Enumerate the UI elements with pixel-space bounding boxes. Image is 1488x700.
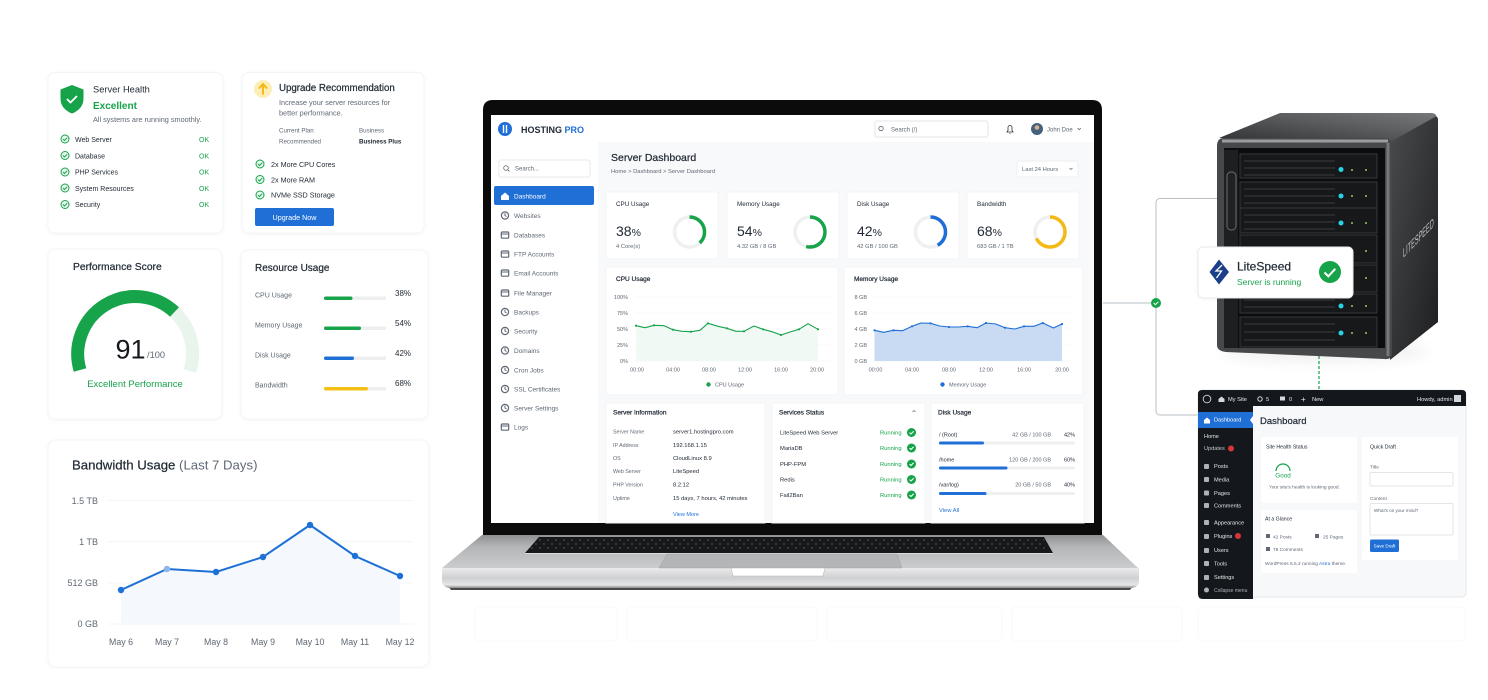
wp card: quick draft: Title [1370,464,1379,470]
panel: disk usage: View All [939,508,959,514]
panel: resource usage [241,250,428,419]
wp sidebar: Pages [1214,491,1230,497]
status list: Web Server [75,137,112,144]
wp admin bar: 0 [1289,397,1292,403]
status list: OK [199,154,209,160]
line chart: bandwidth: May 6 [109,637,133,647]
dropdown: last 24 hours [1017,161,1078,177]
wp sidebar: Users [1214,548,1229,554]
wp heading: Dashboard [1260,416,1306,427]
chart: cpu usage: 25% [617,343,628,349]
heading: bandwidth usage: Bandwidth Usage (Last 7 Days) [72,458,257,472]
nav items: Databases [514,232,546,240]
stat: memory usage: 4.32 GB / 8 GB [737,244,776,250]
panel: services status: Fail2Ban [780,493,803,499]
icon: check [1319,261,1341,283]
chart: memory usage: Memory Usage [949,382,986,388]
button: upgrade now [255,208,334,226]
chart: memory usage: 8 GB [854,295,867,301]
logo: hosting pro: HOSTING PRO [521,125,584,135]
chart: cpu usage: 20:00 [810,368,824,374]
wp admin bar [1198,390,1466,406]
top bar: John Doe [1047,128,1073,134]
feature list: NVMe SSD Storage [271,190,335,200]
nav: dashboard active: Dashboard [514,194,546,200]
feature list: 2x More CPU Cores [271,160,336,169]
status list: Database [75,154,105,160]
wp card: site health: Your site's health is looking good. [1269,484,1340,490]
chart: gauge [78,297,193,371]
text: description: better performance. [279,108,343,118]
nav items: File Manager [514,290,553,298]
panel: server information: server1.hostingpro.com [673,430,734,436]
door handle [1227,172,1236,230]
panel: disk usage: Disk Usage [938,410,972,416]
chart: memory usage: 16:00 [1017,368,1031,374]
nav items: SSL Certificates [514,386,561,394]
laptop bezel [483,100,1102,535]
panel: bandwidth usage [48,440,429,667]
panel: services status: MariaDB [780,446,803,452]
stat: bandwidth: Bandwidth [977,201,1007,208]
status list: PHP Services [75,170,119,176]
panel: server information: CloudLinux 8.9 [673,456,712,462]
text: description [279,98,391,118]
nav items: Security [514,328,538,336]
stat: memory usage [727,192,839,259]
nav items: Cron Jobs [514,368,544,374]
wp sidebar: Appearance [1214,520,1244,526]
stat: bandwidth: 68% [977,223,1002,239]
nav items: Domains [514,348,540,355]
score: 91: 91 [116,334,146,364]
panel: disk usage: 60% [1064,458,1075,464]
nav items: Backups [514,310,540,316]
heading: server health: Server Health [93,84,150,94]
wp card: at a glance: 78 Comments [1273,547,1303,553]
status list: OK [199,170,209,176]
vent lines [1244,161,1335,340]
chart: cpu usage: 12:00 [738,368,752,374]
decorative reflection boxes [475,607,1465,641]
heading: resource usage: Resource Usage [255,263,330,274]
resource bars: 54% [395,319,411,328]
stat: disk usage: Disk Usage [857,201,890,208]
laptop [442,100,1139,590]
stat: cpu usage [606,192,718,259]
panel: server information: LiteSpeed [673,469,699,475]
wp card: at a glance: At a Glance [1265,516,1292,522]
heading: server dashboard: Server Dashboard [611,152,696,164]
resource bars: 38% [395,289,411,298]
chart: memory usage: 04:00 [905,368,919,374]
stat: disk usage: 42% [857,223,882,239]
panel: server information: OS [613,456,621,462]
status leds [1338,167,1367,336]
chart: cpu usage: CPU Usage [715,382,744,388]
resource bars [255,289,411,390]
nav items: Websites [514,213,541,220]
wp sidebar [1198,406,1253,599]
wp sidebar: Media [1214,478,1230,484]
status list [61,135,209,209]
stat: disk usage: 42 GB / 100 GB [857,244,898,250]
wp sidebar: Updates [1204,446,1225,452]
resource bars: Bandwidth [255,382,288,390]
score: 91: /100 [147,350,165,360]
chart: cpu usage: 16:00 [774,368,788,374]
chart: cpu usage: 04:00 [666,368,680,374]
wp card: quick draft: Quick Draft [1370,444,1397,450]
panel: services status [772,403,925,523]
status: excellent: Excellent [93,101,138,112]
plan comparison: Recommended [279,138,322,146]
top bar: Search (/) [891,128,917,134]
stat: disk usage [847,192,959,259]
text: all systems: All systems are running smoothly. [93,115,202,124]
text: description: Increase your server resources for [279,98,391,107]
wp card: site health: Site Health Status [1266,444,1308,450]
wp card: quick draft: Save Draft [1374,544,1396,548]
chart: memory usage: 12:00 [979,368,993,374]
chart: memory usage: 08:00 [942,368,956,374]
wp sidebar: Settings [1214,575,1234,581]
panel: services status: Running [880,430,902,436]
chart: cpu usage: 100% [614,295,628,301]
plan comparison [279,128,402,146]
score: 91 [116,334,165,364]
panel: services status: Running [880,478,902,484]
logo: hosting pro [498,122,584,136]
resource bars: Disk Usage [255,352,291,360]
panel: server information: Web Server [613,469,641,475]
chart: memory usage [844,267,1083,395]
panel: disk usage: 40% [1064,482,1075,488]
heading: upgrade recommendation: Upgrade Recommendation [279,83,395,94]
wp card: site health [1261,437,1357,503]
panel: server information: IP Address [613,443,639,449]
resource bars: CPU Usage [255,292,292,300]
panel: disk usage: /home [939,458,954,464]
chart: cpu usage: 75% [617,311,628,317]
line chart: bandwidth: 1.5 TB [72,496,98,506]
wp sidebar: Posts [1214,464,1228,470]
line chart: bandwidth: May 11 [341,637,369,647]
wp sidebar: Home [1204,434,1219,440]
heading: server dashboard: Home > Dashboard > Server Dashboard [611,169,715,175]
panel: server information: Server Information [613,410,667,416]
status list: OK [199,137,209,144]
panel: disk usage: 20 GB / 50 GB [1015,482,1051,488]
panel: disk usage [931,403,1084,523]
panel: wordpress dashboard [1198,390,1466,599]
chart: cpu usage: 08:00 [702,368,716,374]
panel: server information: View More [673,512,699,518]
chart: cpu usage [606,267,838,395]
line chart: bandwidth: May 9 [251,637,275,647]
icon: upgrade arrow [254,80,272,98]
card: litespeed status [1198,247,1353,298]
panel: server information: 192.168.1.15 [673,443,707,449]
stat: bandwidth: 683 GB / 1 TB [977,244,1014,250]
panel: disk usage: 120 GB / 200 GB [1009,458,1051,464]
line chart: bandwidth: May 7 [155,637,179,647]
heading: server dashboard [611,152,715,175]
status list: OK [199,202,209,209]
text: litespeed: LiteSpeed [1237,260,1291,274]
wp admin bar: 5 [1266,397,1269,403]
wp card: at a glance [1261,510,1357,573]
brand: litespeed on side: LITESPEED [1403,215,1434,261]
wp sidebar: Dashboard [1214,418,1241,424]
wp admin bar: My Site [1228,397,1247,403]
wp card: at a glance: WordPress 6.5.2 running Astra theme. [1265,561,1346,567]
sidebar search: Search... [515,166,539,172]
panel: disk usage: 42% [1064,432,1075,438]
line chart: bandwidth: May 10 [296,637,325,647]
panel: services status: LiteSpeed Web Server [780,430,838,436]
laptop base [442,535,1139,590]
text: server is running: Server is running [1237,277,1302,287]
chart: memory usage: 00:00 [869,368,882,374]
nav items: FTP Accounts [514,252,555,258]
panel: services status: Running [880,446,902,452]
icon: litespeed logo [1210,260,1229,284]
feature list: 2x More RAM [271,176,315,184]
wp sidebar: Tools [1214,562,1227,568]
panel: server information [606,403,765,523]
chart: memory usage: 20:00 [1055,368,1069,374]
line chart: bandwidth: May 12 [386,637,415,647]
chart: memory usage: 6 GB [854,311,867,317]
plan comparison: Business [359,128,384,134]
stat: memory usage: 54% [737,223,762,239]
wp card: at a glance: 42 Posts [1273,534,1292,540]
wp admin bar: + [1301,395,1306,404]
chart: cpu usage: 0% [620,359,628,365]
panel: server health [48,72,223,233]
panel: disk usage: /var/log) [939,482,959,488]
connector lines [1103,198,1319,415]
resource bars: Memory Usage [255,322,303,330]
wp card: quick draft: Content [1370,496,1387,502]
feature list [256,160,336,200]
panel: server information: 15 days, 7 hours, 42 minutes [673,496,748,502]
chart: memory usage: Memory Usage [854,276,898,283]
status list: System Resources [75,186,134,193]
sidebar [491,115,598,523]
wp sidebar: Plugins [1214,534,1233,540]
stat: memory usage: Memory Usage [737,201,780,208]
nav items: Email Accounts [514,270,559,278]
server bays [1240,154,1377,347]
wp card: at a glance: 25 Pages [1323,534,1344,540]
resource bars: 68% [395,379,411,388]
panel: server information: PHP Version [613,482,643,488]
line chart: bandwidth: 512 GB [67,578,98,588]
panel: services status: Redis [780,478,795,484]
chart: memory usage: 2 GB [854,343,867,349]
line chart: bandwidth: 1 TB [79,537,98,547]
server hardware [1217,113,1438,362]
panel: performance score [48,249,222,419]
panel: services status: Services Status [779,410,825,416]
heading: performance score: Performance Score [73,262,162,273]
panel: services status: Running [880,493,902,499]
wp sidebar: Collapse menu [1214,588,1248,594]
laptop screen [491,115,1094,523]
plan comparison: Business Plus [359,138,402,146]
plan comparison: Current Plan [279,128,314,134]
panel: server information: 8.2.12 [673,482,689,488]
panel: services status: Running [880,462,902,468]
panel: server information: Uptime [613,496,630,502]
nav items: Server Settings [514,406,559,412]
wp admin bar: Howdy, admin [1417,397,1453,403]
chart: cpu usage: 50% [617,327,628,333]
nav items: Logs [514,424,529,432]
stat: cpu usage: 4 Core(s) [616,244,640,250]
resource bars: 42% [395,349,411,358]
nav: dashboard active [494,186,594,205]
chart: cpu usage: 00:00 [630,368,644,374]
label: excellent performance: Excellent Performance [87,379,183,390]
nav items [501,212,561,432]
chart: memory usage: 4 GB [854,327,867,333]
panel: server information: Server Name [613,430,644,436]
line chart: bandwidth [67,496,415,647]
wp card: site health: Good [1275,472,1291,480]
top bar [598,115,1094,142]
wp admin bar: New [1312,397,1324,403]
sidebar search [499,160,590,177]
stat: cpu usage: 38% [616,223,641,239]
panel: upgrade recommendation [242,72,424,233]
stat: bandwidth [967,192,1079,259]
button: upgrade now: Upgrade Now [273,213,317,222]
panel: disk usage: 42 GB / 100 GB [1012,432,1051,438]
panel: disk usage: / (Root) [939,432,958,438]
line chart: bandwidth: 0 GB [77,619,98,629]
wp card: quick draft: What's on your mind? [1374,508,1419,513]
wp card: quick draft [1362,437,1458,560]
panel: services status: PHP-FPM [780,462,806,468]
chart: cpu usage: CPU Usage [616,276,651,283]
line chart: bandwidth: May 8 [204,637,228,647]
icon: shield [60,85,84,114]
status list: Security [75,202,101,209]
status list: OK [199,186,209,193]
dropdown: last 24 hours: Last 24 Hours [1022,167,1058,173]
chart: memory usage: 0 GB [854,359,867,365]
wp sidebar: Comments [1214,504,1241,510]
stat: cpu usage: CPU Usage [616,201,650,208]
